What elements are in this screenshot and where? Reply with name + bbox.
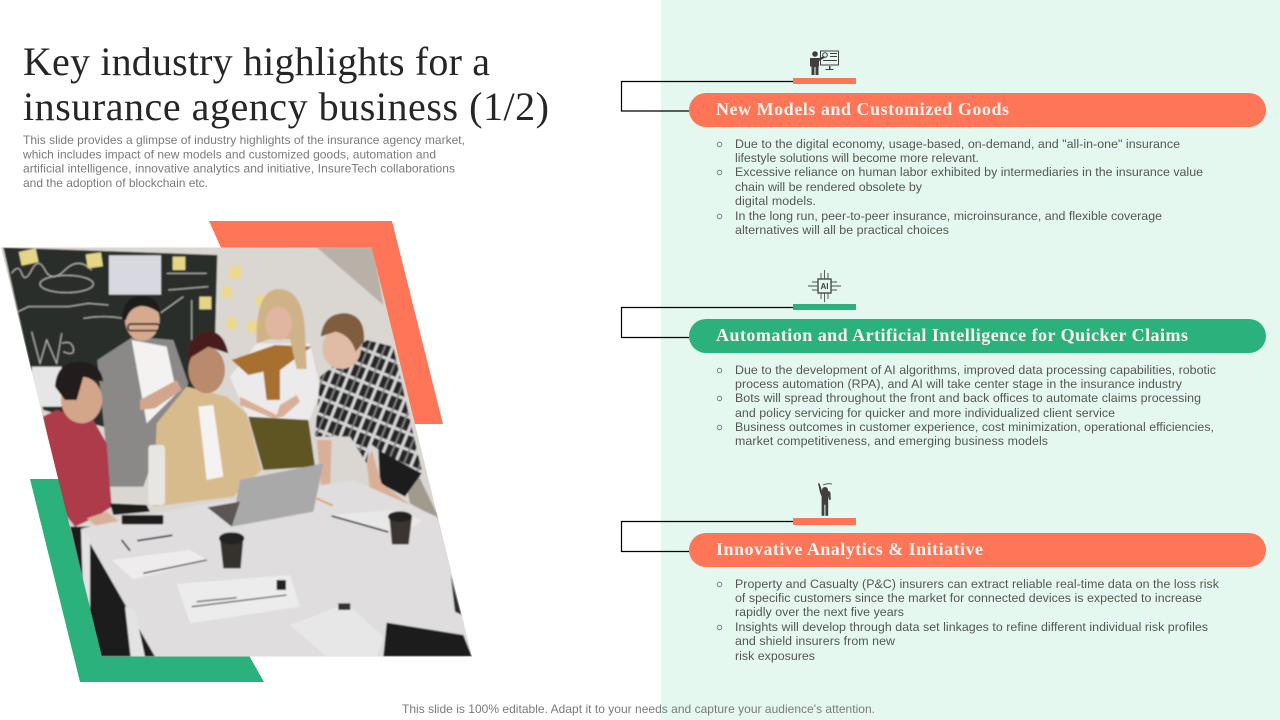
panel: mint background (661, 0, 1280, 720)
footer note: This slide is 100% editable. Adapt it to your needs and capture your audience's attention. (402, 702, 875, 716)
heading pill (689, 93, 1266, 127)
bullet list: and policy servicing for quicker and more individualized client service (735, 406, 1115, 420)
bullet list: chain will be rendered obsolete by (735, 180, 923, 194)
photo: team around a table (0, 243, 483, 663)
icon: presenter with screen (810, 50, 839, 75)
connector line (622, 308, 793, 338)
intro text block (22, 133, 465, 190)
intro text block: which includes impact of new models and customized goods, automation and (22, 148, 436, 162)
person: leaning man in plaid (315, 340, 422, 473)
bullet list: and shield insurers from new (735, 634, 895, 648)
section 3: innovative analytics (622, 483, 1266, 663)
icon: AI chip: AI (820, 282, 828, 291)
bullet list: digital models. (735, 194, 816, 208)
person: man in beanie (153, 387, 262, 507)
bullet list: In the long run, peer-to-peer insurance, microinsurance, and flexible coverage (735, 209, 1162, 223)
sticky notes on wall (222, 266, 266, 333)
connector line (622, 82, 793, 111)
bullet list: rapidly over the next five years (735, 605, 904, 619)
person: standing woman (97, 337, 188, 487)
bullet list: Due to the development of AI algorithms, improved data processing capabilities, robotic (735, 363, 1216, 377)
section 1: new models (622, 50, 1266, 237)
bullet list: market competitiveness, and emerging business models (735, 434, 1048, 448)
section 3: innovative analytics: Innovative Analytics & Initiative (716, 539, 983, 559)
person: standing blonde woman (230, 343, 321, 423)
table (82, 480, 473, 657)
bullet list: Property and Casualty (P&C) insurers can extract reliable real-time data on the loss risk (735, 577, 1220, 591)
section 1: new models: New Models and Customized Goods (716, 99, 1009, 119)
accent shape: orange parallelogram (209, 221, 443, 424)
heading pill (689, 319, 1266, 353)
chalkboard (2, 248, 218, 428)
intro text block: artificial intelligence, innovative analytics and initiative, InsureTech collaborations (23, 162, 455, 176)
dark area under table (70, 527, 160, 657)
icon: AI chip (808, 270, 841, 302)
accent bar (793, 518, 856, 525)
bullet list (717, 137, 1203, 237)
icon: person raising arm (818, 483, 832, 516)
title: insurance agency business (1/2) (23, 84, 549, 129)
heading pill (689, 533, 1266, 567)
intro text block: This slide provides a glimpse of industry highlights of the insurance agency market, (23, 133, 465, 147)
bullet list: risk exposures (735, 649, 815, 663)
accent bar (793, 304, 856, 310)
bullet list: alternatives will all be practical choices (735, 223, 949, 237)
accent shape: green parallelogram (30, 479, 264, 682)
bullet list: of specific customers since the market for connected devices is expected to increase (735, 591, 1202, 605)
title: Key industry highlights for a (23, 39, 490, 84)
title (23, 39, 549, 129)
intro text block: and the adoption of blockchain etc. (23, 176, 208, 190)
connector line (622, 522, 793, 552)
bullet list: Business outcomes in customer experience, cost minimization, operational efficiencies, (735, 420, 1214, 434)
bullet list: Due to the digital economy, usage-based, on-demand, and "all-in-one" insurance (735, 137, 1180, 151)
section 2: automation and AI (622, 270, 1266, 448)
coffee cups (220, 538, 243, 568)
accent bar (793, 78, 856, 84)
bullet list: Bots will spread throughout the front and back offices to automate claims processing (735, 391, 1201, 405)
bullet list: Excessive reliance on human labor exhibited by intermediaries in the insurance value (735, 165, 1203, 179)
section 2: automation and AI: Automation and Artificial Intelligence for Quicker Claims (716, 325, 1188, 345)
objects on table (122, 515, 163, 524)
bullet list (717, 363, 1216, 448)
bullet list: process automation (RPA), and AI will take center stage in the insurance industry (735, 377, 1183, 391)
bullet list: Insights will develop through data set linkages to refine different individual risk profiles (735, 620, 1208, 634)
bullet list (717, 577, 1220, 663)
person: man in red sweater (43, 410, 112, 527)
bullet list: lifestyle solutions will become more relevant. (735, 151, 979, 165)
laptop (232, 463, 323, 527)
